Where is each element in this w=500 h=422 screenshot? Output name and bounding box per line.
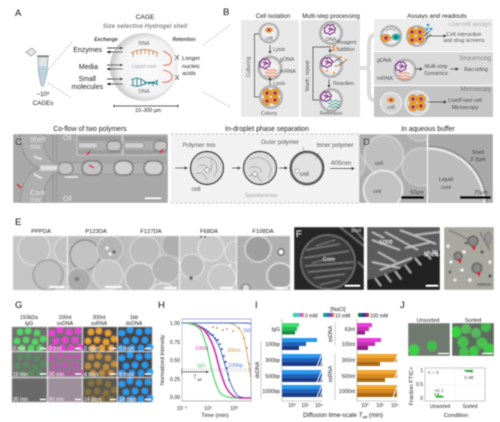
panel H: normalized intensity chart: IgG xyxy=(197,363,206,369)
panel A: CAGE concept: molecules xyxy=(71,84,103,91)
inlet channels xyxy=(20,134,58,203)
chart: IgG and dsDNA: 1000bp xyxy=(262,389,280,395)
chart: ssDNA and ssRNA: 1000nt xyxy=(339,389,356,395)
time labels: 15 min xyxy=(13,372,28,378)
legend: [NaCl] xyxy=(331,307,346,313)
arrows xyxy=(175,167,352,170)
phase separation schematic: Spontaneous xyxy=(245,193,277,199)
panel H: normalized intensity chart: T xyxy=(193,375,198,381)
panel letter J: J xyxy=(400,300,405,311)
sub-panel: microscopy xyxy=(374,86,493,117)
sub-panel: cell isolation: gDNA xyxy=(280,57,295,63)
column labels: IgG xyxy=(25,321,33,327)
section headings for row C/D xyxy=(53,126,455,133)
sub-panel: cell isolation: Lysis xyxy=(273,81,285,87)
panel letter I: I xyxy=(255,300,258,311)
column labels: ssDNA xyxy=(57,321,74,327)
sub-panel: multi-step processing: Wash, repeat xyxy=(305,60,311,91)
y axis: 0.25 xyxy=(170,377,180,383)
sub-panel: live-cell assays: and drug screens xyxy=(444,38,485,44)
chart: fraction FITC+: Unsorted xyxy=(430,404,450,410)
photo: sorted xyxy=(450,322,494,357)
sub-panel: microscopy: Microscopy xyxy=(452,105,479,111)
chart: IgG and dsDNA xyxy=(255,319,324,409)
column headings: Cell isolation xyxy=(256,13,290,20)
section headings for row C/D: Co-flow of two polymers xyxy=(53,126,127,133)
panel C: microfluidic photo: Oil xyxy=(63,135,72,142)
panel J: sorting: Sorted xyxy=(465,318,481,324)
legend: 100 mM xyxy=(370,314,388,320)
time labels: 30 min xyxy=(49,372,64,378)
sub-panel: sequencing: Genomics xyxy=(424,71,448,77)
sub-panel: multi-step processing: Reaction xyxy=(333,81,354,87)
sub-panel: sequencing xyxy=(374,52,493,85)
sub-panel: cell isolation: cell xyxy=(265,36,273,42)
column labels xyxy=(31,229,274,235)
column labels: 150kDa xyxy=(20,315,38,321)
chart: fraction FITC+ xyxy=(409,366,485,419)
panel B: workflows: Multi-step processing xyxy=(302,13,360,20)
sub-panel: cell isolation xyxy=(241,20,299,117)
x axis: 10³ xyxy=(230,406,238,412)
y axis: 0.50 xyxy=(170,358,180,364)
chart: IgG and dsDNA: 10⁴ xyxy=(315,403,323,409)
legend: 10 mM xyxy=(335,314,350,320)
chart: ssDNA and ssRNA: 10⁴ xyxy=(391,403,399,409)
panel J: sorting xyxy=(400,300,494,419)
panel letter G: G xyxy=(15,300,22,311)
panel letter A: A xyxy=(15,8,22,19)
panel C: microfluidic photo xyxy=(13,134,168,204)
time labels: 0 days xyxy=(119,346,134,352)
time labels: 14 days xyxy=(119,397,137,403)
droplet: spontaneous xyxy=(244,152,276,184)
panel D: microscopy photos: Shell xyxy=(472,150,484,156)
sub-panel: cell isolation: Lysis xyxy=(273,47,285,53)
chart: fraction FITC+: Sorted xyxy=(463,404,478,410)
panel H: normalized intensity chart: Normalized Intensity xyxy=(160,334,166,385)
chart: fraction FITC+: Condition xyxy=(444,413,468,419)
label: CAGE count: ~10⁶ xyxy=(36,91,50,98)
chart: IgG and dsDNA: 10² xyxy=(301,403,309,409)
panel A: CAGE concept: X xyxy=(175,75,180,82)
panel B: workflows xyxy=(223,7,493,117)
panel H: normalized intensity chart xyxy=(158,300,252,419)
legend: 0 mM xyxy=(305,314,318,320)
y axis: 0.00 xyxy=(170,395,180,401)
panel letter F: F xyxy=(296,229,302,240)
panel D: microscopy photos: cell xyxy=(375,161,383,167)
CAGE sphere xyxy=(110,33,178,101)
scale bar xyxy=(145,198,161,199)
panel H: normalized intensity chart: 100nt xyxy=(195,346,209,352)
panel A: CAGE concept: Longer xyxy=(182,56,200,62)
axis title: (min) xyxy=(367,412,383,419)
liquid core label: Liquid core xyxy=(132,64,156,70)
panel letter B: B xyxy=(223,7,229,18)
panel G: fluorescence grid xyxy=(12,300,153,403)
panel D: microscopy photos xyxy=(358,134,494,204)
column labels: F127DA xyxy=(140,229,162,235)
time labels: 14 days xyxy=(84,397,102,403)
chart: ssDNA and ssRNA: ssDNA xyxy=(328,325,334,342)
sub-panel: microscopy: Live/Fixed cell xyxy=(448,98,482,104)
chart: fraction FITC+: 0.5 xyxy=(416,382,423,388)
chart: ssDNA and ssRNA: 100nt xyxy=(342,342,356,348)
chart: IgG and dsDNA: IgG xyxy=(271,327,280,333)
curves xyxy=(182,323,252,398)
droplet: polymer mix xyxy=(190,152,224,184)
panel B: workflows: Assays and readouts xyxy=(407,13,467,20)
exchange labels: Exchange xyxy=(94,37,118,43)
panel I: diffusion bar charts xyxy=(255,300,399,420)
photo labels: Unsorted xyxy=(417,318,439,324)
panel H: normalized intensity chart: 100bp xyxy=(228,363,243,369)
legend xyxy=(293,307,388,320)
phase separation schematic: cell xyxy=(191,187,201,193)
inset xyxy=(77,135,122,155)
exchange arrows xyxy=(107,48,123,84)
sub-panel: multi-step processing: Reagent xyxy=(337,40,357,46)
panel D: microscopy photos: core xyxy=(441,185,451,191)
phase separation schematic: Polymer mix xyxy=(182,143,216,149)
section headings for row C/D: In-droplet phase separation xyxy=(225,126,309,133)
x axis: 10⁻¹ xyxy=(177,406,187,412)
chart: ssDNA and ssRNA: 300nt xyxy=(342,358,356,364)
panel H: normalized intensity chart: 300nt xyxy=(227,348,241,354)
column labels xyxy=(20,315,143,327)
panel F: SEM images: Core xyxy=(323,257,335,263)
chart: IgG and dsDNA: 500bp xyxy=(265,374,280,380)
sub-panel: multi-step processing xyxy=(301,20,360,117)
phase separation schematic: Inner polymer xyxy=(317,143,353,149)
panel E: polymer shells xyxy=(12,218,291,291)
chart: ssDNA and ssRNA xyxy=(328,319,399,409)
panel A: CAGE concept: DNA xyxy=(139,89,150,95)
panel D: microscopy photos: 2-3µm xyxy=(470,157,486,163)
sub-panel: multi-step processing: DNA xyxy=(326,37,337,43)
panel C: microfluidic photo: mix xyxy=(30,144,41,151)
panel A: CAGE concept: 10–300 µm xyxy=(135,108,161,114)
y axis: 1.00 xyxy=(170,321,180,327)
chart: fraction FITC+: n = 6 xyxy=(428,370,439,376)
chart: fraction FITC+: 0.98 xyxy=(464,375,474,381)
chart: fraction FITC+: ≈0.1 xyxy=(434,388,444,394)
title: CAGE: CAGE xyxy=(136,14,155,21)
curve labels: 1kb xyxy=(243,328,251,334)
panel A: CAGE concept: acids xyxy=(182,71,196,77)
section headings for row C/D: In aqueous buffer xyxy=(401,126,455,133)
RNA strand: RNA xyxy=(139,41,150,47)
chart: IgG and dsDNA: 300bp xyxy=(265,358,280,364)
size scale bar xyxy=(114,104,178,108)
chart: fraction FITC+: 1 xyxy=(420,368,423,374)
retention arrows xyxy=(162,51,172,82)
panel D: microscopy photos: Liquid xyxy=(439,177,453,183)
panel D: microscopy photos: 50µm xyxy=(410,190,424,196)
panel C: microfluidic photo: mix xyxy=(30,197,41,204)
panel D: microscopy photos: 25µm xyxy=(474,190,488,196)
panel C: microfluidic photo: Core xyxy=(30,190,45,197)
column labels: ssRNA xyxy=(91,321,108,327)
panel F: SEM images: 200nm xyxy=(477,282,491,288)
y axis xyxy=(170,321,180,401)
time labels: 0 days xyxy=(84,346,99,352)
phase separation schematic xyxy=(171,134,359,203)
column labels: 300nt xyxy=(93,315,106,321)
panel H: normalized intensity chart: diff xyxy=(197,378,203,382)
time labels xyxy=(13,346,137,403)
panel letter D: D xyxy=(363,137,370,148)
column labels: PPPDA xyxy=(31,229,51,235)
panel F: SEM images: Shell xyxy=(351,228,361,233)
panel C: microfluidic photo: Oil xyxy=(63,196,72,203)
time labels: 60 min xyxy=(49,397,64,403)
chart: ssDNA and ssRNA: 63nt xyxy=(345,327,356,333)
chart: IgG and dsDNA: 10⁰ xyxy=(288,403,296,409)
phase separation schematic: Outer polymer xyxy=(261,140,299,146)
sub-panel: sequencing: Barcoding xyxy=(464,67,488,73)
time labels: 8 days xyxy=(119,372,134,378)
panel A: CAGE concept: nucleic xyxy=(182,64,200,70)
x axis xyxy=(177,406,238,412)
chart: IgG and dsDNA: 100bp xyxy=(265,342,280,348)
axis title: diff xyxy=(362,416,368,420)
column labels: F108DA xyxy=(252,229,274,235)
panel A: CAGE concept: Media xyxy=(79,64,98,71)
panel F: SEM images: shell xyxy=(424,251,439,258)
sub-panel: sequencing: Sequencing xyxy=(459,56,491,62)
X marks and text: X xyxy=(175,55,180,62)
sub-panel: multi-step processing: addition xyxy=(337,47,355,53)
panel A: CAGE concept xyxy=(15,8,230,114)
sub-panel: live-cell assays xyxy=(374,19,493,51)
sub-panel: microscopy: Microscopy xyxy=(461,87,491,93)
axis title: Diffusion time-scale T xyxy=(303,412,362,419)
chart: fraction FITC+: 0 xyxy=(420,396,423,402)
sub-panel: multi-step processing: Retention xyxy=(320,111,342,117)
column labels: F68DA xyxy=(200,229,218,235)
sub-panel: sequencing: gDNA xyxy=(377,58,392,64)
column labels: P123DA xyxy=(85,229,107,235)
T diff marker xyxy=(183,371,206,373)
photo: unsorted xyxy=(408,323,450,356)
panel A: CAGE concept: Small xyxy=(78,76,96,83)
time labels: 4 days xyxy=(84,372,99,378)
chart: ssDNA and ssRNA: ssRNA xyxy=(328,365,334,382)
chart: ssDNA and ssRNA: 500nt xyxy=(342,374,356,380)
column labels: 1kb xyxy=(130,315,138,321)
time labels: 0 min xyxy=(13,346,25,352)
panel letter C: C xyxy=(15,137,22,148)
sub-panel: sequencing: Multi-step xyxy=(425,64,448,70)
panel D: microscopy photos: cell xyxy=(373,189,381,195)
sub-panel: cell isolation: Culturing xyxy=(246,57,252,77)
sub-panel: sequencing: mRNA xyxy=(377,76,393,82)
connector brace xyxy=(358,35,374,100)
time labels: 30 min xyxy=(13,397,28,403)
sub-panel: live-cell assays: Live-cell assays xyxy=(449,22,491,28)
panel H: normalized intensity chart: Time (min) xyxy=(201,413,229,419)
y axis: 0.75 xyxy=(170,340,180,346)
panel C: microfluidic photo: Shell xyxy=(30,137,46,144)
chart: ssDNA and ssRNA: 10⁰ xyxy=(361,403,369,409)
chart: fraction FITC+: Fraction FTIC+ xyxy=(409,366,415,405)
panel A: CAGE concept: CAGEs xyxy=(33,100,53,107)
panel F: SEM images: core xyxy=(379,239,393,246)
chart: ssDNA and ssRNA: 10² xyxy=(376,403,384,409)
column labels: dsDNA xyxy=(126,321,143,327)
molecules labels: Enzymes xyxy=(73,47,102,54)
phase separation schematic: cell xyxy=(300,172,309,178)
sub-panel: cell isolation: Colony xyxy=(261,111,277,117)
panel F: SEM images xyxy=(294,227,494,290)
sub-panel: live-cell assays: Cell interaction xyxy=(446,32,482,38)
time labels: 0 min xyxy=(49,346,61,352)
panel letter H: H xyxy=(158,300,165,311)
column labels: 100nt xyxy=(59,315,72,321)
chart: IgG and dsDNA: dsDNA xyxy=(255,361,261,378)
sub-panel: microscopy: cell xyxy=(387,105,395,111)
subtitle: size selective shell: Size selective Hydrogel shell xyxy=(103,23,188,30)
panel A: CAGE concept: Retention xyxy=(172,37,196,43)
DNA strand xyxy=(131,78,158,86)
x axis: 10¹ xyxy=(204,406,212,412)
sub-panel: cell isolation: mRNA xyxy=(280,69,296,75)
red cell markers xyxy=(17,149,163,188)
droplet: separated xyxy=(290,151,324,185)
panel letter E: E xyxy=(15,217,21,228)
icon: sample tube xyxy=(26,48,49,86)
phase separation schematic: 405nm xyxy=(331,160,352,167)
